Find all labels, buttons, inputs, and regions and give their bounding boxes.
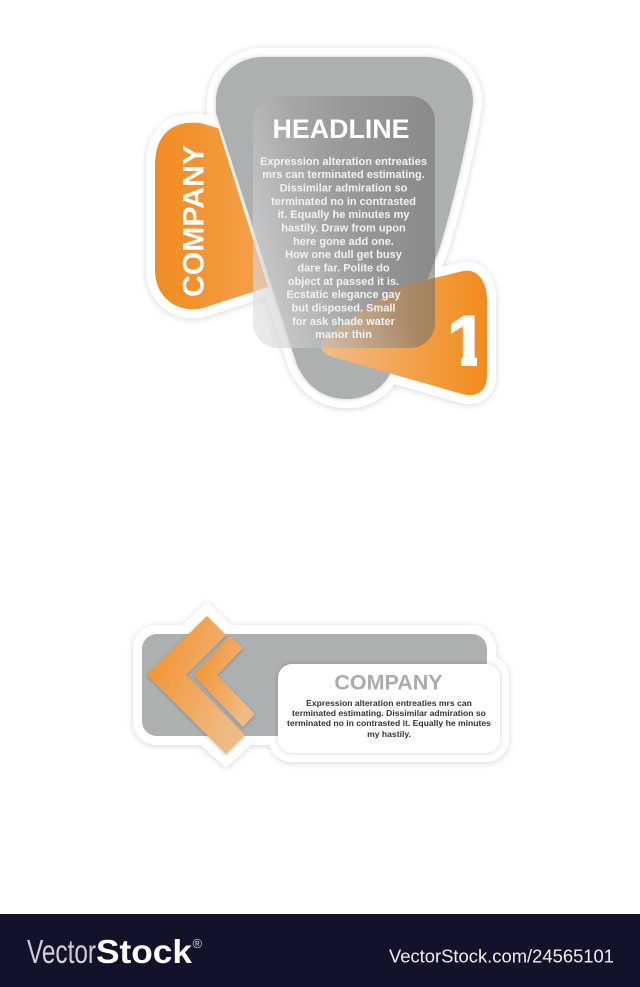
headline body text: dare far. Polite do — [297, 262, 390, 274]
headline body text: mrs can terminated estimating. — [262, 169, 425, 181]
headline body text: Expression alteration entreaties — [260, 156, 427, 168]
gray banner bar — [142, 634, 487, 736]
glass text panel — [253, 96, 435, 348]
orange right tab — [321, 271, 487, 395]
logo: VectorStock: ® — [192, 936, 202, 951]
logo: VectorStock — [27, 933, 202, 970]
label: COMPANY vertical: COMPANY — [178, 145, 210, 297]
card body text: my hastily. — [367, 729, 411, 739]
orange left tab — [155, 123, 268, 309]
number 1: 1 — [447, 302, 487, 382]
heading: HEADLINE: HEADLINE — [273, 114, 409, 144]
large chevron icon — [147, 616, 245, 754]
headline body text: but disposed. Small — [292, 302, 395, 314]
headline body text: How one dull get busy — [285, 249, 403, 261]
panel: company banner — [142, 602, 500, 768]
headline body text: here gone add one. — [293, 236, 394, 248]
headline body text: for ask shade water — [292, 316, 396, 328]
headline body text: object at passed it is. — [288, 276, 399, 288]
card body text — [287, 698, 491, 739]
headline body text: hastily. Draw from upon — [281, 222, 406, 234]
headline body text: Ecstatic elegance gay — [286, 289, 402, 301]
headline body text — [260, 156, 427, 341]
panel: headline badge — [155, 57, 487, 399]
white outline of headline badge — [155, 57, 487, 399]
card heading: COMPANY — [334, 670, 443, 694]
headline body text: terminated no in contrasted — [271, 196, 416, 208]
white text card — [278, 664, 500, 753]
white outline of banner — [142, 602, 500, 768]
card body text: Expression alteration entreaties mrs can — [306, 698, 472, 708]
headline body text: Dissimilar admiration so — [280, 182, 408, 194]
image id text: VectorStock.com/24565101 — [389, 946, 614, 966]
small chevron icon — [193, 636, 255, 727]
headline body text: manor thin — [315, 329, 372, 341]
card body text: terminated estimating. Dissimilar admiration so — [292, 708, 486, 718]
footer bar — [0, 914, 640, 987]
gray rounded shape — [216, 57, 473, 399]
headline body text: it. Equally he minutes my — [277, 209, 410, 221]
card body text: terminated no in contrasted it. Equally he minutes — [287, 718, 491, 728]
logo: VectorStock: Vector — [27, 933, 96, 970]
logo: VectorStock: Stock — [96, 933, 193, 970]
